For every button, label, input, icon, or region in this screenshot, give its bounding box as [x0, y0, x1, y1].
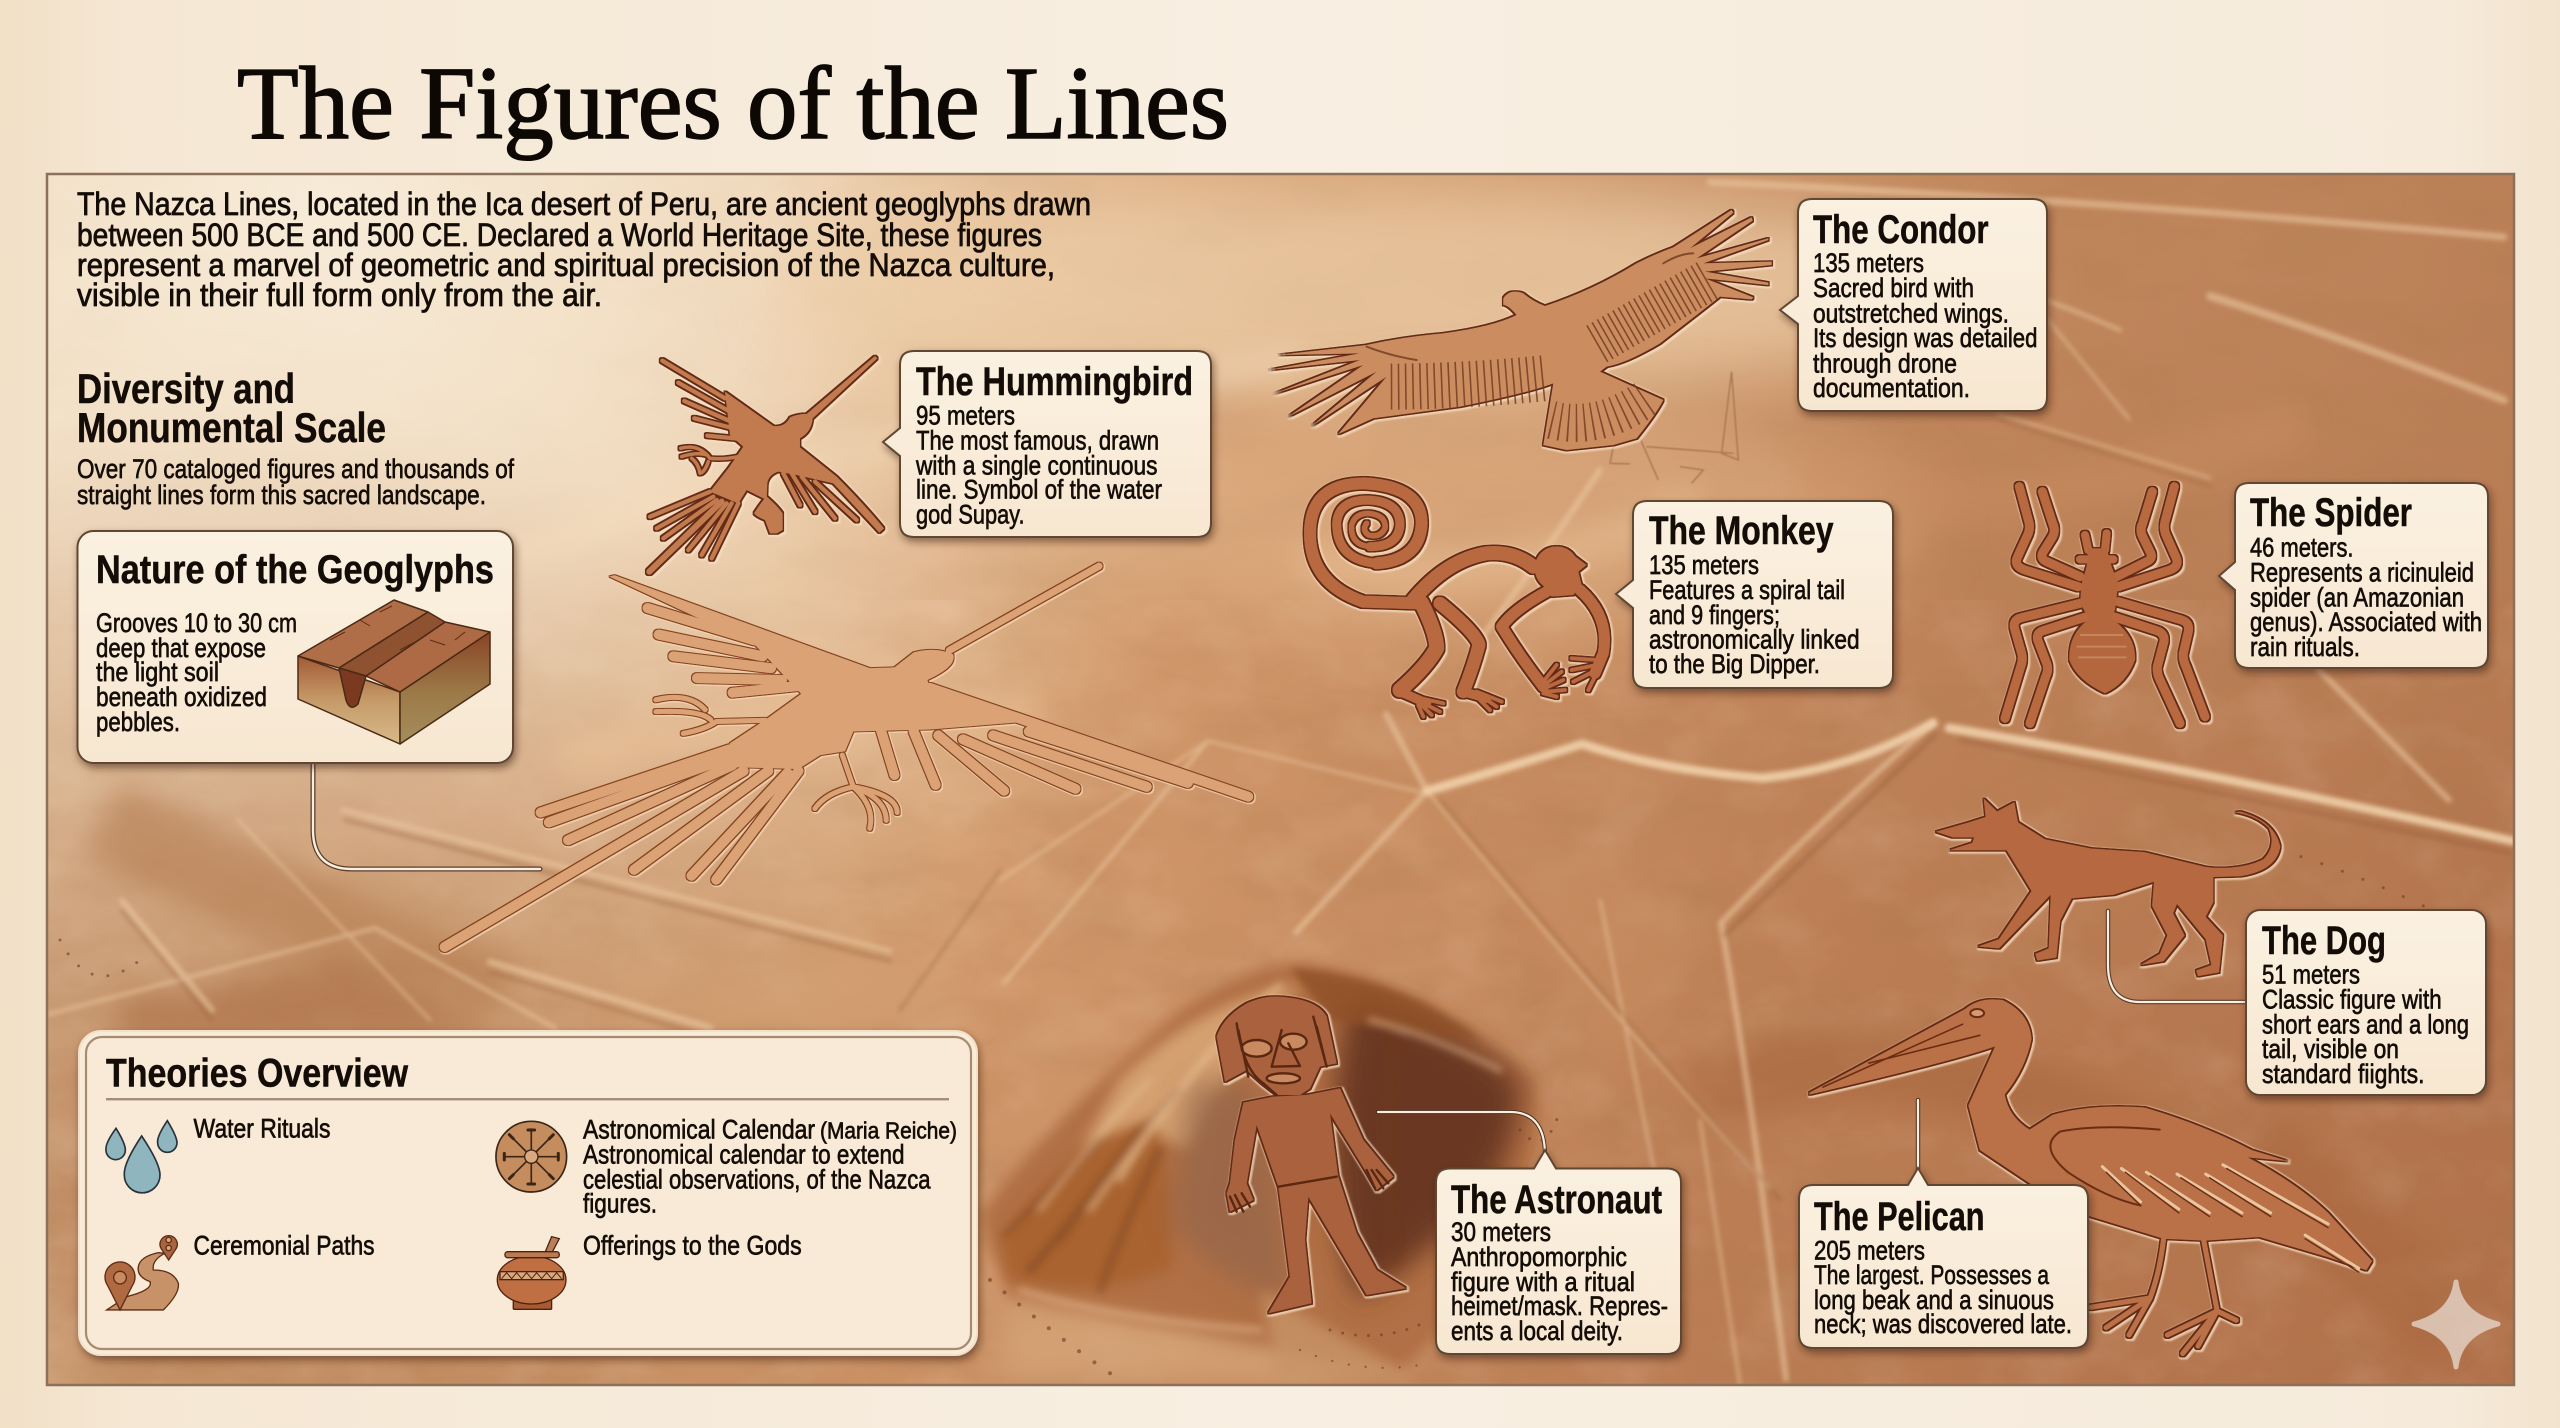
intro text: represent a marvel of geometric and spiritual precision of the Nazca culture, [77, 247, 1055, 283]
heading: The Monkey [1649, 509, 1834, 553]
text block: Sacred bird with [1813, 273, 1974, 303]
figure: small hummingbird [649, 356, 884, 572]
text block: Its design was detailed [1813, 323, 2038, 353]
heading: Theories Overview [106, 1052, 409, 1096]
text block: pebbles. [96, 707, 180, 737]
callout: the pelican [1799, 1168, 2088, 1348]
text block: tail, visible on [2262, 1034, 2399, 1064]
text block: short ears and a long [2262, 1010, 2469, 1040]
heading: Nature of the Geoglyphs [96, 548, 494, 592]
text block: Represents a ricinuleid [2250, 558, 2474, 588]
scattered pebbles [60, 510, 2490, 1380]
text block [915, 400, 1162, 530]
text block: cataloged figures: Over 70 cataloged figures and thousands of [77, 454, 514, 484]
text block: spider (an Amazonian [2250, 582, 2464, 612]
intro text [77, 186, 1091, 313]
callout: the hummingbird [883, 351, 1211, 537]
figure: pelican [1810, 999, 2372, 1354]
icon: soil block with groove [298, 600, 490, 744]
callout: the condor [1780, 199, 2047, 411]
text block [96, 608, 297, 737]
item: astronomical calendar: (Maria Reiche) [820, 1117, 957, 1143]
text block: and 9 fingers; [1649, 600, 1780, 630]
callout: the astronaut [1436, 1150, 1681, 1354]
heading: The Spider [2250, 491, 2412, 535]
callout: the spider [2219, 483, 2488, 668]
figure: condor [1268, 210, 1772, 450]
mountain with the astronaut [980, 963, 1536, 1380]
heading: The Dog [2262, 919, 2386, 963]
figure: monkey [1310, 483, 1605, 717]
text block: line. Symbol of the water [916, 475, 1162, 505]
item: astronomical calendar: figures. [583, 1189, 657, 1219]
text block: the light soil [96, 657, 219, 687]
item: ceremonial paths: Ceremonial Paths [194, 1230, 374, 1260]
connector: astronaut card to astronaut [1378, 1112, 1545, 1155]
heading: The Hummingbird [916, 360, 1193, 404]
text block [2262, 960, 2469, 1089]
text block: 205 meters [1814, 1236, 1925, 1266]
item: water rituals: Water Rituals [194, 1114, 330, 1144]
text block: cataloged figures: straight lines form this sacred landscape. [77, 480, 486, 510]
text block: beneath oxidized [96, 682, 267, 712]
item: astronomical calendar: celestial observations, of the Nazca [583, 1164, 931, 1194]
text block [2250, 532, 2482, 662]
text block: 135 meters [1649, 550, 1759, 580]
icon: water drops [106, 1121, 177, 1193]
text block: figure with a ritual [1451, 1267, 1635, 1297]
text block [1649, 550, 1860, 679]
item: astronomical calendar: Astronomical calendar to extend [583, 1140, 904, 1170]
text block: long beak and a sinuous [1814, 1285, 2054, 1315]
text block [1451, 1217, 1668, 1346]
item: offerings to the gods: Offerings to the Gods [583, 1230, 802, 1260]
text block: The most famous, drawn [916, 426, 1159, 456]
text block: cataloged figures [77, 454, 514, 510]
panel: nature of the geoglyphs [78, 531, 513, 763]
intro text: visible in their full form only from the air. [77, 277, 602, 313]
text block: 135 meters [1813, 248, 1924, 278]
text block: outstretched wings. [1813, 298, 2009, 328]
connector: geoglyph card to large hummingbird [313, 763, 540, 869]
text block: Classic figure with [2262, 985, 2442, 1015]
panel: theories overview [79, 1031, 977, 1355]
text block: rain rituals. [2250, 632, 2360, 662]
heading: The Condor [1813, 208, 1989, 252]
text block: god Supay. [916, 500, 1024, 530]
text block: with a single continuous [915, 450, 1158, 480]
icon: offering pot [497, 1237, 566, 1309]
text block: 51 meters [2262, 960, 2360, 990]
text block [1814, 1236, 2072, 1339]
text block: 46 meters. [2250, 532, 2354, 562]
text block [1813, 248, 2038, 403]
callout: the dog [2246, 910, 2486, 1095]
heading: The Astronaut [1451, 1178, 1662, 1222]
text block: Anthropomorphic [1451, 1242, 1627, 1272]
text block: Features a spiral tail [1649, 575, 1845, 605]
figure: dog [1936, 798, 2280, 976]
text block: to the Big Dipper. [1649, 649, 1820, 679]
bright main ground line [1427, 723, 2513, 841]
connector: pelican card to pelican [1916, 1100, 1920, 1170]
text block: deep that expose [96, 633, 266, 663]
heading: diversity and monumental scale: Monumental Scale [77, 404, 386, 451]
spider abdomen stripes [2077, 635, 2127, 657]
watermark star [2414, 1282, 2498, 1367]
heading: diversity and monumental scale: Diversity and [77, 365, 295, 412]
item: astronomical calendar: Astronomical Calendar [583, 1114, 815, 1144]
figure: large hummingbird [445, 566, 1248, 947]
intro text: The Nazca Lines, located in the Ica desert of Peru, are ancient geoglyphs drawn [77, 186, 1091, 222]
heading: The Pelican [1814, 1195, 1984, 1239]
text block: documentation. [1813, 373, 1970, 403]
text block: 30 meters [1451, 1217, 1551, 1247]
text block: heimet/mask. Repres- [1451, 1291, 1668, 1321]
item: astronomical calendar [583, 1114, 957, 1219]
text block: standard fiights. [2262, 1059, 2424, 1089]
text block: 95 meters [916, 400, 1015, 430]
intro text: between 500 BCE and 500 CE. Declared a World Heritage Site, these figures [77, 217, 1042, 253]
figure: astronaut [1217, 997, 1406, 1313]
text block: The largest. Possesses a [1814, 1260, 2050, 1290]
text block: through drone [1813, 348, 1957, 378]
title: The Figures of the Lines [237, 46, 1229, 161]
icon: calendar wheel [496, 1121, 567, 1192]
text block: Grooves 10 to 30 cm [96, 608, 297, 638]
text block: astronomically linked [1649, 624, 1860, 654]
heading: diversity and monumental scale [77, 365, 386, 451]
figure: spider [2005, 487, 2205, 723]
connector: dog card to dog [2108, 911, 2246, 1002]
text block: genus). Associated with [2250, 607, 2482, 637]
text block: ents a local deity. [1451, 1316, 1623, 1346]
icon: ceremonial path [105, 1236, 178, 1310]
text block: neck; was discovered late. [1814, 1309, 2072, 1339]
callout: the monkey [1616, 501, 1893, 688]
small abstract lines under the condor [1610, 372, 1738, 483]
